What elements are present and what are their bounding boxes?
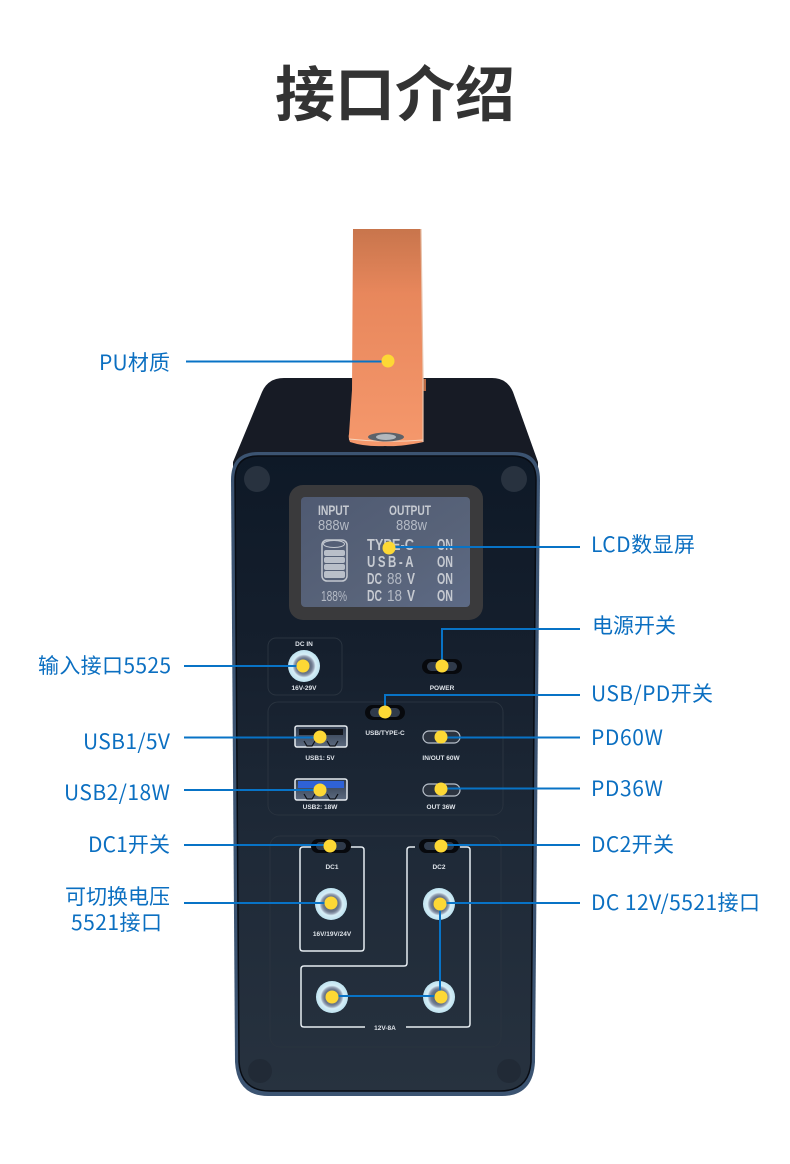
- callout: DC 12V port group: DC 12V/5521接口: [591, 887, 760, 917]
- callout: LCD display: [382, 529, 695, 559]
- LCD display: DC: [367, 571, 382, 588]
- LCD display: OUTPUT: [389, 502, 431, 518]
- title: 接口介绍: [275, 62, 515, 129]
- DC2 switch: DC2: [432, 864, 446, 871]
- callout: power switch: [436, 610, 676, 672]
- DC outlines: [300, 847, 470, 1027]
- LCD display: 188%: [321, 588, 347, 605]
- USB2 port: USB2: 18W: [303, 804, 338, 811]
- DC IN port: 16V-29V: [292, 685, 317, 692]
- PD60W port: [422, 731, 460, 762]
- LCD display: USB-A: [367, 552, 416, 570]
- USB2 port: [295, 779, 347, 811]
- DC1 switch: DC1: [325, 864, 339, 871]
- callout: DC 12V port group: [326, 887, 760, 1004]
- callout: switchable voltage port: 可切换电压: [65, 881, 170, 911]
- callout: USB/PD switch: USB/PD开关: [591, 678, 713, 708]
- recessed panels: [268, 638, 503, 1047]
- callout: LCD display: LCD数显屏: [591, 529, 695, 559]
- LCD display: INPUT: [318, 502, 349, 518]
- callout: input port: 输入接口5525: [38, 650, 171, 680]
- callout: USB1: USB1/5V: [83, 726, 171, 756]
- device top housing: [233, 378, 538, 500]
- power station device: [231, 229, 540, 1096]
- leather strap handle: [349, 229, 426, 446]
- callout: USB2: [64, 777, 326, 807]
- callout: PD60W: [434, 722, 663, 752]
- LCD display: ON: [437, 537, 453, 554]
- PD60W port: IN/OUT 60W: [422, 755, 460, 762]
- DC1 switch: [311, 839, 351, 871]
- front face frame: [231, 452, 540, 1096]
- LCD display: [289, 485, 483, 620]
- DC jacks: 16V/19V/24V: [313, 931, 352, 938]
- callout: PD60W: PD60W: [591, 722, 663, 752]
- callout: USB/PD switch: [378, 678, 713, 718]
- LCD display: V: [407, 571, 415, 588]
- USB1 port: USB1: 5V: [305, 755, 335, 762]
- callout: switchable voltage port: 5521接口: [71, 907, 162, 937]
- LCD display: 18: [387, 588, 402, 605]
- callout: PD36W: [434, 773, 663, 803]
- callout: switchable voltage port: [65, 881, 338, 937]
- power switch: [422, 659, 462, 692]
- callout: DC2 switch: [434, 829, 674, 859]
- LCD display: V: [407, 588, 415, 605]
- LCD display: DC: [367, 588, 382, 605]
- corner feet: [244, 466, 527, 1083]
- callout: input port: [38, 650, 310, 680]
- callout: PU material: [99, 347, 394, 377]
- LCD display: ON: [437, 554, 453, 571]
- callout: PD36W: PD36W: [591, 773, 663, 803]
- USB1 port: [295, 726, 347, 762]
- DC IN port: DC IN: [295, 641, 313, 648]
- USB/Type-C switch: USB/TYPE-C: [365, 730, 405, 737]
- callout: power switch: 电源开关: [592, 610, 676, 640]
- USB/Type-C switch: [365, 705, 405, 737]
- LCD display: 88: [387, 571, 402, 588]
- PD36W port: OUT 36W: [427, 804, 456, 811]
- DC jacks: 12V-8A: [374, 1025, 396, 1032]
- callout: DC1 switch: [88, 829, 336, 859]
- front face panel: [235, 456, 536, 1091]
- LCD display: ON: [437, 571, 453, 588]
- callout: USB1: [83, 726, 326, 756]
- callout: DC2 switch: DC2开关: [591, 829, 674, 859]
- power switch: POWER: [430, 685, 455, 692]
- DC IN port: [288, 641, 320, 692]
- LCD display: ON: [437, 588, 453, 605]
- battery icon: [322, 540, 347, 581]
- callout: USB2: USB2/18W: [64, 777, 170, 807]
- PD36W port: [423, 784, 460, 811]
- DC jacks: [313, 888, 455, 1032]
- DC2 switch: [419, 839, 459, 871]
- callout: DC1 switch: DC1开关: [88, 829, 170, 859]
- LCD display: 888w: [396, 517, 427, 534]
- LCD display: 888w: [318, 517, 349, 534]
- LCD display: TYPE-C: [367, 537, 414, 554]
- callout: PU material: PU材质: [99, 347, 170, 377]
